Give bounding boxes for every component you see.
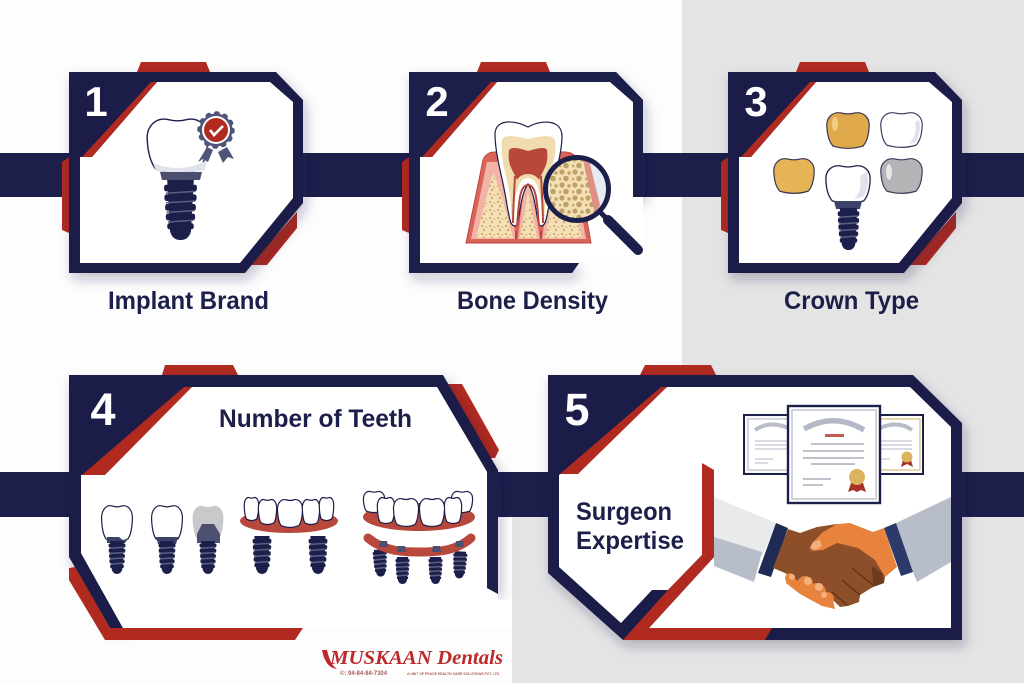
heading: number of teeth: Number of Teeth bbox=[219, 405, 412, 433]
panel: implant brand bbox=[62, 62, 303, 273]
number 3: 3 bbox=[744, 78, 768, 125]
icon: crown material options bbox=[774, 113, 922, 250]
label: implant brand: Implant Brand bbox=[108, 287, 269, 315]
heading: surgeon expertise: Expertise bbox=[576, 527, 684, 555]
panel: crown type bbox=[721, 62, 962, 273]
logo: Muskaan Dentals: A UNIT OF PEACE HEALTH CARE SOLUTIONS PVT. LTD. bbox=[407, 671, 500, 676]
number 4: 4 bbox=[90, 384, 116, 435]
icon: implant with quality badge bbox=[147, 114, 234, 240]
icon: certificates bbox=[744, 406, 923, 503]
connector band: bottom row bbox=[0, 472, 1024, 517]
panel: surgeon expertise bbox=[548, 365, 962, 640]
icon: tooth cross-section with magnifier bbox=[466, 122, 638, 250]
icon: full arch implants bbox=[363, 491, 475, 584]
label: crown type: Crown Type bbox=[784, 287, 919, 315]
panel: number of teeth bbox=[69, 365, 512, 640]
icon: implant bridge bbox=[240, 497, 338, 574]
label: bone density: Bone Density bbox=[457, 287, 608, 315]
number 1: 1 bbox=[84, 78, 108, 125]
panel: bone density bbox=[402, 62, 643, 273]
number 5: 5 bbox=[564, 384, 590, 435]
logo: Muskaan Dentals: MUSKAAN Dentals bbox=[329, 647, 503, 669]
logo: Muskaan Dentals bbox=[322, 647, 503, 677]
connector band: top row bbox=[0, 153, 1024, 197]
heading: surgeon expertise bbox=[576, 498, 684, 555]
number 2: 2 bbox=[425, 78, 449, 125]
icon: single tooth implants bbox=[102, 506, 223, 574]
logo: Muskaan Dentals: ©: 94-84-84-7304 bbox=[340, 669, 387, 677]
heading: surgeon expertise: Surgeon bbox=[576, 498, 672, 526]
icon: handshake bbox=[714, 497, 951, 609]
